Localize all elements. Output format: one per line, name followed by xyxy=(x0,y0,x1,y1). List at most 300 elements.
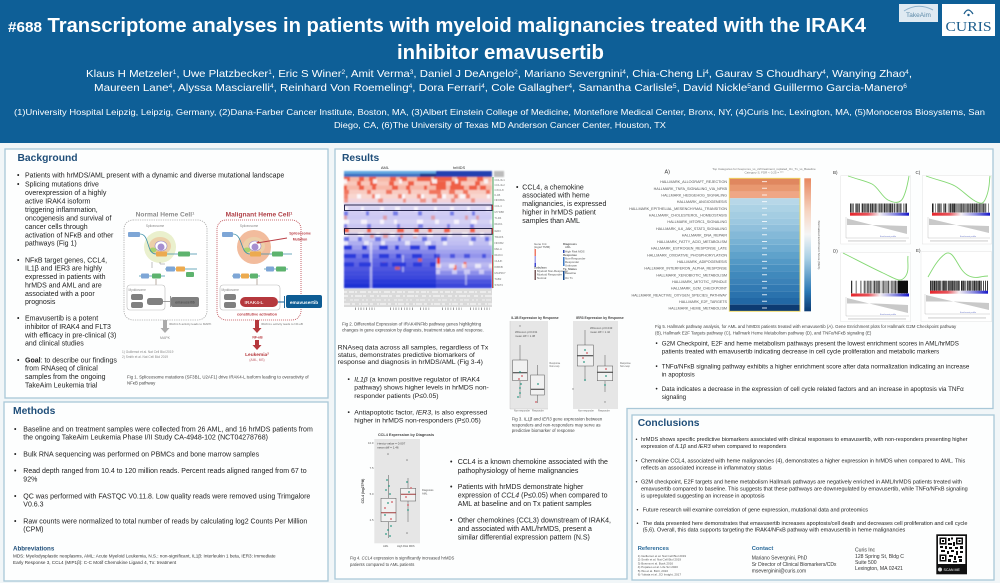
figure 5 caption: Fig 5. Hallmark pathway analysis, for AML and hrMDS patients treated with emavusertib (A). Gene Enrichment plots for Hallmark G2M Checkpoint pathway xyxy=(655,324,957,329)
contact xyxy=(752,546,837,575)
figure 1: spliceosome diagram xyxy=(122,210,322,362)
CCL4 findings bullet text: pathophysiology of heme malignancies xyxy=(458,468,579,475)
abbreviations: Early Response 3, CCL4 (MIP1β): C-C Motif Chemokine Ligand 4, Tx: treatment xyxy=(13,560,177,565)
CCL4 findings bullet text: • xyxy=(450,459,453,466)
conclusions bullet list: The data presented here demonstrates that emavusertib increases apoptosis/cell death and decreases cell proliferation and cell cycle xyxy=(643,521,967,527)
boxplot: CCL4 expression by diagnosis: AML xyxy=(383,544,389,548)
header banner xyxy=(0,0,1000,143)
panel: methods xyxy=(4,402,328,581)
conclusions bullet list: (5,6). Overall, this data supports targeting the IRAK4/NFκB pathway with emavusertib in heme malignancies xyxy=(643,528,906,534)
normal heme cell: Spliceosome xyxy=(146,224,164,228)
boxplot: CCL4 expression by diagnosis: AML xyxy=(422,492,428,496)
pathway labels: HALLMARK_IL6_JAK_STAT3_SIGNALING xyxy=(656,227,727,231)
background bullet list: • xyxy=(17,316,20,323)
pathway labels: HALLMARK_ADIPOGENESIS xyxy=(677,260,728,264)
background bullet list: inhibitor of IRAK4 and FLT3 xyxy=(25,324,111,331)
methods bullet list: • xyxy=(14,468,17,475)
gene labels: IER3 xyxy=(494,229,501,233)
gene labels: RELA xyxy=(494,247,502,251)
figure 5 caption: (B), Hallmark E2F Targets pathway (C), Hallmark Heme Metabolism pathway (D), and TNFα/NFκB signaling (E) xyxy=(655,330,872,335)
CCL4 findings bullet text: • xyxy=(450,484,453,491)
gene labels: IRAK4 xyxy=(494,253,503,257)
authors: , Gaurav S Choudhary xyxy=(709,68,823,80)
boxplot: IER3 expression by response: Responder xyxy=(598,410,610,412)
figure 3 caption xyxy=(512,417,603,433)
company address xyxy=(855,547,904,572)
methods bullet list: Baseline and on treatment samples were collected from 26 AML, and 16 hrMDS patients from xyxy=(23,426,313,433)
pathway labels: HALLMARK_XENOBIOTIC_METABOLISM xyxy=(656,273,727,277)
methods bullet list: QC was performed with FASTQC V0.11.8. Low quality reads were removed using Trimgalore xyxy=(23,493,310,500)
figure 1 caption: NFκB pathway xyxy=(127,380,156,386)
pathway cells xyxy=(729,178,821,311)
emavusertib drug xyxy=(286,295,322,308)
pathway labels: HALLMARK_E2F_TARGETS xyxy=(679,300,728,304)
gene labels: CHUK xyxy=(494,259,503,263)
authors: 2 xyxy=(342,70,346,76)
GSEA plot B: Enrichment profile xyxy=(880,235,897,238)
gene labels: TLR4 xyxy=(494,216,502,220)
figure 1 references: 1) Guillemot et al. Nat Cell Biol 2019 xyxy=(122,350,174,354)
boxplot: CCL4 expression by diagnosis: CCL4 Expression by Diagnosis xyxy=(378,433,434,437)
background bullet list: expressed in patients with xyxy=(25,274,106,281)
CCL4 bullet text: samples than AML xyxy=(522,218,580,225)
results body text: RNAseq data across all samples, regardless of Tx xyxy=(338,344,489,352)
boxplot: CCL4 expression by diagnosis: 7.5 xyxy=(370,466,374,470)
authors: 4 xyxy=(622,70,627,76)
pathway findings bullet text: G2M Checkpoint, E2F and heme metabolism pathways present the lowest enrichment scores in AML/hrMDS xyxy=(662,341,959,348)
gene labels: NFKB2 xyxy=(494,241,504,245)
boxplot: IL1B expression by response: mean diff = 1.38 xyxy=(515,334,536,338)
references: 6) Yukata et al. JCI Insight, 2017 xyxy=(638,572,681,576)
GSEA plot E: E) xyxy=(916,248,921,253)
boxplot: CCL4 expression by diagnosis xyxy=(361,433,434,548)
conclusions bullet list: Future research will examine correlation of gene expression, mutational data and proteomics xyxy=(643,507,868,513)
figure 5A: hallmark pathway heatmap xyxy=(629,167,821,311)
heatmap: IRAK4/NFkb genes xyxy=(344,165,506,309)
annotation tracks xyxy=(344,289,492,309)
pathway labels: HALLMARK_G2M_CHECKPOINT xyxy=(671,287,728,291)
authors: , xyxy=(909,68,912,80)
authors: 4 xyxy=(822,70,827,76)
malignant heme cell: Spliceosome xyxy=(289,232,311,236)
figure 4 caption xyxy=(350,555,454,567)
authors: 6 xyxy=(903,84,908,90)
authors: 4 xyxy=(409,84,413,90)
poster title: #688 xyxy=(8,19,42,36)
affiliations: Diego, CA, (6)The University of Texas MD Anderson Cancer Center, Houston, TX xyxy=(334,120,666,130)
background bullet list: • xyxy=(17,182,20,189)
methods bullet list: the ongoing TakeAim Leukemia Phase I/II Study CA-4948-102 (NCT04278768) xyxy=(23,435,268,442)
malignant heme cell: Spliceosome xyxy=(240,224,258,228)
company address: Suite 500 xyxy=(855,560,877,566)
results body text: Antiapoptotic factor, IER3, is also expressed xyxy=(354,410,488,417)
pathway labels: HALLMARK_INTERFERON_ALPHA_RESPONSE xyxy=(644,267,728,271)
CCL4 bullet text: associated with heme xyxy=(522,193,590,200)
authors: 4 xyxy=(705,70,709,76)
GSEA plot C: C) xyxy=(916,170,921,175)
boxplot: IER3 expression by response: Non-resp xyxy=(620,365,631,368)
authors: , David Nickle xyxy=(677,82,747,94)
heatmap legend: High Risk MDS xyxy=(565,250,585,254)
background bullet list: from RNAseq of clinical xyxy=(25,366,98,373)
malignant heme cell: constitutive activation xyxy=(237,312,278,316)
company address: 128 Spring St, Bldg C xyxy=(855,554,904,560)
normal heme cell: MAPK xyxy=(160,336,171,340)
company address: Curis Inc xyxy=(855,547,876,553)
pathway labels: HALLMARK_TNFA_SIGNALING_VIA_NFKB xyxy=(654,187,728,191)
heatmap legend: On Tx xyxy=(565,276,573,280)
GSEA plot E xyxy=(916,248,992,322)
gene labels: TAB2 xyxy=(494,277,502,281)
boxplot: IER3 expression by response: mean diff = 1.42 xyxy=(590,330,611,334)
authors: Maureen Lane xyxy=(94,82,162,94)
panel: conclusions xyxy=(632,415,994,580)
heatmap legend: Subclass xyxy=(534,266,547,270)
heatmap: IRAK4/NFkb genes: AML xyxy=(381,165,390,170)
conclusions bullet list: • xyxy=(636,479,638,485)
authors: , Daniel J DeAngelo xyxy=(413,68,514,80)
CCL4 findings bullet text: • xyxy=(450,517,453,524)
GSEA plot D: Enrichment profile xyxy=(880,313,897,316)
CCL4 findings bullet text: and associated with AML/hrMDS, present a xyxy=(458,526,592,533)
heatmap: IRAK4/NFkb genes: hrMDS xyxy=(453,165,466,170)
boxplot: CCL4 expression by diagnosis: t-test p-value = 0.007 xyxy=(377,442,406,446)
heatmap legend xyxy=(534,242,585,280)
methods bullet list: Bulk RNA sequencing was performed on PBMCs and bone marrow samples xyxy=(23,452,260,459)
heatmap legend: Response xyxy=(563,253,577,257)
malignant heme cell: Mutation xyxy=(293,238,307,242)
boxplot: IER3 expression by response: Response xyxy=(620,362,631,365)
conclusions bullet list: G2M checkpoint, E2F targets and heme metabolism Hallmark pathways are negatively enriched in AML/hrMDS patients treated with xyxy=(641,479,962,485)
gene labels: CXCL8 xyxy=(494,188,504,192)
authors: 4 xyxy=(270,84,274,90)
malignant heme cell: NF-κB xyxy=(252,336,263,340)
pathway findings bullet text: patients treated with emavusertib indicating decrease in cell cycle proliferation and metabolic markers xyxy=(662,349,939,356)
pathway labels: HALLMARK_HEDGEHOG_SIGNALING xyxy=(661,194,727,198)
poster title: Transcriptome analyses in patients with myeloid malignancies treated with the IRAK4 xyxy=(48,15,867,37)
pathway labels: HALLMARK_MITOTIC_SPINDLE xyxy=(672,280,728,284)
QR code: SCAN ME xyxy=(944,568,960,572)
authors: 4 xyxy=(481,84,485,90)
results body text: status, demonstrates predictive biomarkers of xyxy=(338,352,475,359)
abbreviations: MDS: Myelodysplastic neoplasms, AML: Acute Myeloid Leukemia, N.S.: non-significant, IL1β: Interleukin 1 beta, IER3: Immediate xyxy=(13,554,276,558)
heatmap legend: Normal xyxy=(537,276,547,280)
GSEA plot D: D) xyxy=(833,248,838,254)
affiliations xyxy=(14,107,985,130)
CCL4 bullet text: • xyxy=(516,184,519,191)
CCL4 findings bullet text: CCL4 is a known chemokine associated with the xyxy=(458,459,608,466)
background bullet list: Splicing mutations drive xyxy=(25,182,99,189)
heatmap legend: (logs2 TMM) xyxy=(534,245,550,249)
contact: Contact xyxy=(752,546,773,552)
gene labels: CCL3L1 xyxy=(494,178,505,182)
figure 3 caption: responders and non-responders may serve as xyxy=(512,422,601,427)
normal heme cell: IRAK4-S activity leads to MAPK xyxy=(169,322,211,326)
heatmap cell field xyxy=(344,171,504,288)
results body text: responder patients (P≤0.05) xyxy=(354,393,439,400)
results body text: higher in hrMDS non-responders (P≤0.05) xyxy=(354,418,481,425)
methods bullet list: Raw counts were normalized to total number of reads by calculating log2 Counts Per Million xyxy=(23,518,307,525)
IRAK4-L pill xyxy=(240,297,278,307)
heatmap legend: Myeloid Responder xyxy=(537,272,562,276)
background bullet list: samples from the ongoing xyxy=(25,374,106,381)
boxplot: IER3 expression by response: Wilcoxon p=0.043 xyxy=(590,326,613,330)
authors: , Chia-Cheng Li xyxy=(626,68,705,80)
authors: , Alyssa Masciarelli xyxy=(172,82,270,94)
normal heme cell xyxy=(124,210,211,340)
figure 4 caption: Fig 4. CCL4 expression is significantly increased hrMDS xyxy=(350,555,454,560)
heatmap legend: Non-Responder xyxy=(565,256,585,260)
references: 3) Bosma et al. Book 2016 xyxy=(638,561,673,565)
logo: TakeAim: TakeAim xyxy=(906,12,931,19)
figure 5A: hallmark pathway heatmap: A) xyxy=(664,170,670,176)
background bullet list: cancer cells through xyxy=(25,224,88,231)
methods bullet list: • xyxy=(14,452,17,459)
results body text: • xyxy=(348,377,350,384)
GSEA plot C: Enrichment profile xyxy=(960,235,977,238)
GSEA plot D xyxy=(833,248,911,322)
results body text: IL1β (a known positive regulator of IRAK4 xyxy=(354,377,480,384)
contact: mseverginini@curis.com xyxy=(752,569,806,575)
boxplot: IL1B expression by response xyxy=(510,316,561,412)
figure 4 caption: patients compared to AML patients xyxy=(350,562,414,567)
normal heme cell: emavusertib xyxy=(175,300,195,304)
conclusions bullet list: • xyxy=(636,459,638,465)
conclusions bullet list: hrMDS shows specific predictive biomarkers associated with clinical responses to emavusertib, with non-responders presenting higher xyxy=(641,437,968,443)
figure 1 references xyxy=(122,350,174,359)
references: 1) Guillemot et al. Nat Cell Biol 2019 xyxy=(638,554,686,558)
malignant heme cell xyxy=(217,210,322,362)
gene labels: IKBKB xyxy=(494,265,503,269)
figure 5 caption xyxy=(655,324,957,335)
white cells xyxy=(344,181,492,288)
authors: , Cole Gallagher xyxy=(485,82,569,94)
background bullet list: activation of NFκB and other xyxy=(25,232,114,239)
pathway labels: HALLMARK_ESTROGEN_RESPONSE_LATE xyxy=(651,247,728,251)
affiliations: (1)University Hospital Leipzig, Leipzig, Germany, (2)Dana-Farber Cancer Institute, Boston, MA, (3)Albert Einstein College of Medicine, Montefiore Medical Center, Bronx, NY, (4)Curis Inc, Lexington, MA, (5)Monoceros Biosystems, San xyxy=(14,107,985,117)
IRAK4-L pill: IRAK4-L xyxy=(245,300,264,306)
malignant heme cell: 2 xyxy=(267,352,269,356)
background bullet list: • xyxy=(17,257,20,264)
heading: results: Results xyxy=(342,153,379,164)
pathway findings bullet text: • xyxy=(656,386,658,393)
CCL4 findings bullet text: Patients with hrMDS demonstrate higher xyxy=(458,484,584,491)
boxplot: IL1B expression by response: Non-resp xyxy=(550,365,560,368)
heatmap legend: Baseline xyxy=(565,271,576,275)
pathway findings bullet text: Data indicates a decrease in the expression of cell cycle related factors and an increase in apoptosis via TNFα xyxy=(662,386,964,393)
CCL4 findings bullet text: similar differential expression pattern (N.S) xyxy=(458,535,590,542)
authors: , Uwe Platzbecker xyxy=(176,68,269,80)
malignant heme cell: Leukemia xyxy=(245,353,267,358)
pathway labels: HALLMARK_ANGIOGENESIS xyxy=(677,200,728,204)
conclusions bullet list xyxy=(636,437,968,534)
boxplot: IL1B expression by response: Wilcoxon p=0.031 xyxy=(515,330,538,334)
QR code xyxy=(936,534,967,574)
pathway findings bullet text xyxy=(656,341,970,401)
gene labels: TRAF6 xyxy=(494,235,504,239)
logo: TakeAim xyxy=(899,4,938,22)
authors: , Eric S Winer xyxy=(272,68,342,80)
heatmap marked rows xyxy=(344,205,492,210)
gene labels: MAP3K7 xyxy=(494,271,506,275)
methods bullet list: (CPM) xyxy=(23,527,44,534)
background bullet list: with efficacy in pre-clinical (3) xyxy=(24,332,116,339)
contact: Sr Director of Clinical Biomarkers/CDx xyxy=(752,562,837,568)
boxplot: CCL4 expression by diagnosis: 2.5 xyxy=(370,518,374,522)
malignant heme cell: Myddosome xyxy=(222,288,239,292)
authors: 5 xyxy=(747,84,752,90)
logo: Curis xyxy=(942,4,995,36)
pathway labels: HALLMARK_EPITHELIAL_MESENCHYMAL_TRANSITION xyxy=(629,207,727,211)
background bullet list: TakeAim Leukemia trial xyxy=(25,382,98,389)
pathway findings bullet text: signaling xyxy=(662,394,687,401)
pathway labels: HALLMARK_ALLOGRAFT_REJECTION xyxy=(660,180,727,184)
boxplot: IL1B expression by response: Responder xyxy=(532,410,544,412)
gene labels: CCL4 xyxy=(494,204,502,208)
logo: Curis: CURIS xyxy=(946,20,992,35)
authors: , Samantha Carlisle xyxy=(572,82,673,94)
methods bullet list: • xyxy=(14,518,17,525)
background bullet list: active IRAK4 isoform xyxy=(25,198,91,206)
results body text: response and diagnosis in hrMDS/AML (Fig 3-4) xyxy=(338,359,483,366)
heading: methods: Methods xyxy=(13,406,56,417)
authors: , Reinhard Von Roemeling xyxy=(274,82,409,94)
pathway labels: HALLMARK_DNA_REPAIR xyxy=(682,233,727,237)
malignant heme cell: (AML, MS) xyxy=(249,358,265,362)
GSEA plot C xyxy=(916,170,992,244)
authors: Klaus H Metzeler xyxy=(86,68,166,80)
boxplot: IL1B expression by response: Non-responder xyxy=(514,410,530,412)
pathway labels: HALLMARK_OXIDATIVE_PHOSPHORYLATION xyxy=(647,253,727,257)
boxplot: IER3 expression by response: IER3 Expression by Response xyxy=(576,316,624,320)
background bullet list: NFκB target genes, CCL4, xyxy=(25,257,107,264)
conclusions bullet list: is upregulated suggesting an increase in apoptosis xyxy=(641,493,765,499)
results body text: • xyxy=(348,410,350,417)
contact: Mariano Severgnini, PhD xyxy=(752,555,808,561)
boxplot: CCL4 expression by diagnosis: 5.0 xyxy=(370,492,374,496)
conclusions bullet list: emavusertib compared to baseline. This suggests that these pathways are downregulated by emavusertib, while TNFα/NFκB signaling xyxy=(641,486,968,492)
GSEA plot E: Enrichment profile xyxy=(960,311,977,314)
background bullet list: and clinical studies xyxy=(25,341,84,348)
red cells xyxy=(344,179,492,270)
figure 5A: hallmark pathway heatmap: Category S, FDR < 0.25 = *** xyxy=(744,171,784,175)
background bullet list: • xyxy=(17,172,20,179)
pathway cells: Normalized Enrichment Score (NES) xyxy=(817,221,821,269)
CCL4 findings bullet text: expression of CCL4 (P≤0.05) when compared to xyxy=(458,493,608,500)
figure 3 caption: predictive biomarker of response xyxy=(512,428,575,433)
pathway labels xyxy=(629,180,728,311)
gene labels: IL1B xyxy=(494,193,500,197)
boxplot: IER3 expression by response: Non-responder xyxy=(578,410,594,412)
authors: , Wanying Zhao xyxy=(826,68,905,80)
conclusions bullet list: • xyxy=(636,507,638,513)
authors: 4 xyxy=(568,84,573,90)
CCL4 findings bullet text: AML at baseline and on Tx patient samples xyxy=(458,501,592,508)
references: 4) Popateo et al. Life Sci 2020 xyxy=(638,565,678,569)
authors: 3 xyxy=(410,70,414,76)
figure 1 caption xyxy=(127,374,309,386)
gene labels: CCL4L2 xyxy=(494,183,505,187)
company address: Lexington, MA 02421 xyxy=(855,566,903,572)
dark blue cells xyxy=(344,213,492,264)
GSEA plot B xyxy=(833,170,911,244)
poster title: inhibitor emavusertib xyxy=(397,42,604,64)
references xyxy=(638,546,686,576)
authors: , Dora Ferrari xyxy=(412,82,481,94)
conclusions bullet list: expression of IL1β and IER3 when compared to responders xyxy=(641,444,787,450)
authors: 2 xyxy=(514,70,518,76)
figure 2 caption: Fig 2. Differential Expression of IRAK4/NFkb pathway genes highlighting xyxy=(342,322,482,327)
panel: results xyxy=(335,149,993,579)
pathway labels: HALLMARK_HEME_METABOLISM xyxy=(668,307,727,311)
pathway findings bullet text: TNFα/NFκB signaling pathway exhibits a higher enrichment score after data normalization indicating an increase xyxy=(662,364,970,371)
background bullet list: oncogenesis and survival of xyxy=(25,215,111,222)
background bullet list: triggering inflammation, xyxy=(25,207,98,214)
background bullet list: Goal: to describe our findings xyxy=(25,357,117,364)
results body text: pathway) shows higher levels in hrMDS non- xyxy=(354,385,489,392)
heatmap legend: Responder xyxy=(565,260,579,264)
conclusions bullet list: • xyxy=(636,521,638,527)
pathway labels: HALLMARK_MTORC1_SIGNALING xyxy=(667,220,727,224)
methods bullet list: V0.6.3 xyxy=(23,502,44,509)
boxplot: CCL4 expression by diagnosis: High Risk MDS xyxy=(397,544,415,548)
pathway findings bullet text: in apoptosis xyxy=(662,372,695,379)
authors: 1 xyxy=(173,70,177,76)
methods bullet list xyxy=(14,426,313,534)
authors: 4 xyxy=(905,70,910,76)
malignant heme cell: IRAK4-L activity leads to NF-κB xyxy=(261,322,303,326)
heatmap legend: Diagnosis xyxy=(563,242,577,246)
boxplot: IL1B expression by response: IL1B Expression by Response xyxy=(511,316,559,320)
gene labels: NFKBIA xyxy=(494,198,505,202)
authors: , Mariano Severgnini xyxy=(518,68,622,80)
figure 2 caption xyxy=(342,322,484,333)
figure 1 caption: Fig 1. Spliceosome mutations (SF3B1, U2AF1) drive IRAK4-L isoform leading to overactivity of xyxy=(127,374,309,380)
figure 1 references: 2) Smith et al. Nat Cell Biol 2019 xyxy=(122,355,168,359)
conclusions bullet list: • xyxy=(636,437,638,443)
CCL4 bullet text: higher in hrMDS patient xyxy=(522,209,596,216)
boxplot: IER3 expression by response xyxy=(572,316,631,412)
pathway labels: HALLMARK_FATTY_ACID_METABOLISM xyxy=(657,240,727,244)
abbreviations: Abbreviations xyxy=(13,546,55,553)
figure 3 caption: Fig 3. IL1β and IER3 gene expression between xyxy=(512,417,603,422)
authors: 4 xyxy=(169,84,173,90)
background bullet list: hrMDS and AML and are xyxy=(25,282,102,290)
figure 5A: hallmark pathway heatmap: Top Categories for hoeps:res_vs_ctrl/treatment_replated_On_Tx_vs_Baseline xyxy=(712,167,816,171)
boxplot: CCL4 expression by diagnosis: Diagnosis xyxy=(422,488,434,492)
normal heme cell: Normal Heme Cell xyxy=(136,212,192,218)
methods bullet list: • xyxy=(14,493,17,500)
authors: 1 xyxy=(268,70,273,76)
normal heme cell: 1 xyxy=(192,210,195,216)
methods bullet list: Read depth ranged from 10.4 to 120 million reads. Percent reads aligned ranged from 67 to xyxy=(23,468,307,475)
authors: and Guillermo Garcia-Manero xyxy=(751,82,903,94)
CCL4 bullet text: CCL4, a chemokine xyxy=(522,184,584,191)
boxplot: IL1B expression by response: Response xyxy=(550,362,561,365)
references: 2) Smith et al. Nat Cell Biol 2019 xyxy=(638,558,681,562)
authors xyxy=(86,68,912,94)
heading: background: Background xyxy=(18,153,78,164)
background bullet list: overexpression of a highly xyxy=(25,190,107,197)
boxplot: CCL4 expression by diagnosis: 10.0 xyxy=(368,441,374,445)
panel: background xyxy=(5,149,328,398)
conclusions bullet list: reflects an associated increase in inflammatory status xyxy=(641,465,772,471)
CCL4 bullet text xyxy=(516,184,606,225)
heatmap legend: AML xyxy=(565,245,571,249)
heading: conclusions: Conclusions xyxy=(638,418,700,429)
figure 2 caption: changes in gene expression by diagnosis, treatment status and response. xyxy=(342,328,484,333)
background bullet list: prognosis xyxy=(25,299,56,306)
